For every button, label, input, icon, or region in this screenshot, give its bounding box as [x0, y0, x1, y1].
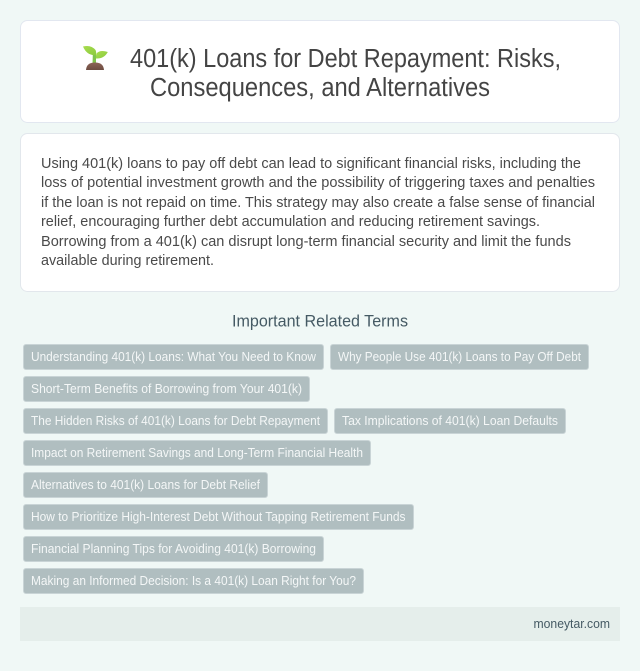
tag: tax implications: [334, 408, 566, 434]
heading: title: 401(k) Loans for Debt Repayment: Risks,: [130, 45, 561, 73]
tag: short-term benefits: [24, 376, 310, 402]
text block: summary: Using 401(k) loans to pay off debt can lead to significant financial risks, including the: [41, 155, 581, 172]
heading: important related terms: Important Related Terms: [232, 312, 408, 330]
tag: financial planning: Financial Planning Tips for Avoiding 401(k) Borrowing: [31, 542, 316, 556]
tag: why people: Why People Use 401(k) Loans to Pay Off Debt: [338, 350, 581, 364]
tag: alternatives: [24, 472, 268, 498]
panel: related terms tags: [24, 344, 588, 594]
tag: informed decision: [24, 568, 364, 594]
heading: title: [130, 45, 561, 102]
text block: summary: available during retirement.: [41, 252, 214, 269]
tag: hidden risks: The Hidden Risks of 401(k) Loans for Debt Repayment: [31, 414, 320, 428]
tag: impact on retirement: Impact on Retirement Savings and Long-Term Financial Health: [31, 446, 363, 460]
text block: summary: [41, 155, 595, 269]
tag: why people: [330, 344, 588, 370]
text block: summary: Borrowing from a 401(k) can disrupt long-term financial security and limit the funds: [41, 233, 571, 250]
tag: alternatives: Alternatives to 401(k) Loans for Debt Relief: [31, 478, 260, 492]
tag: informed decision: Making an Informed Decision: Is a 401(k) Loan Right for You?: [31, 574, 356, 588]
text block: summary: if the loan is not repaid on time. This strategy may also create a false sense of financial: [41, 194, 595, 211]
tag: understanding: [24, 344, 324, 370]
heading: title: Consequences, and Alternatives: [150, 74, 490, 102]
tag: understanding: Understanding 401(k) Loans: What You Need to Know: [31, 350, 317, 364]
icon: seedling: [83, 46, 108, 70]
text block: summary: relief, encouraging further debt accumulation and reducing retirement savings.: [41, 213, 540, 230]
panel: summary text: [20, 134, 620, 292]
text block: summary: loss of potential investment growth and the possibility of triggering taxes and penalties: [41, 174, 595, 191]
footer: moneytar.com: [534, 616, 610, 631]
tag: financial planning: [24, 536, 324, 562]
footer: [20, 607, 620, 641]
tag: prioritize debt: How to Prioritize High-Interest Debt Without Tapping Retirement Funds: [31, 510, 406, 524]
panel: title card: [20, 20, 620, 122]
tag: prioritize debt: [24, 504, 414, 530]
tag: short-term benefits: Short-Term Benefits of Borrowing from Your 401(k): [31, 382, 302, 396]
tag: impact on retirement: [24, 440, 370, 466]
tag: hidden risks: [24, 408, 328, 434]
tag: tax implications: Tax Implications of 401(k) Loan Defaults: [342, 414, 558, 428]
